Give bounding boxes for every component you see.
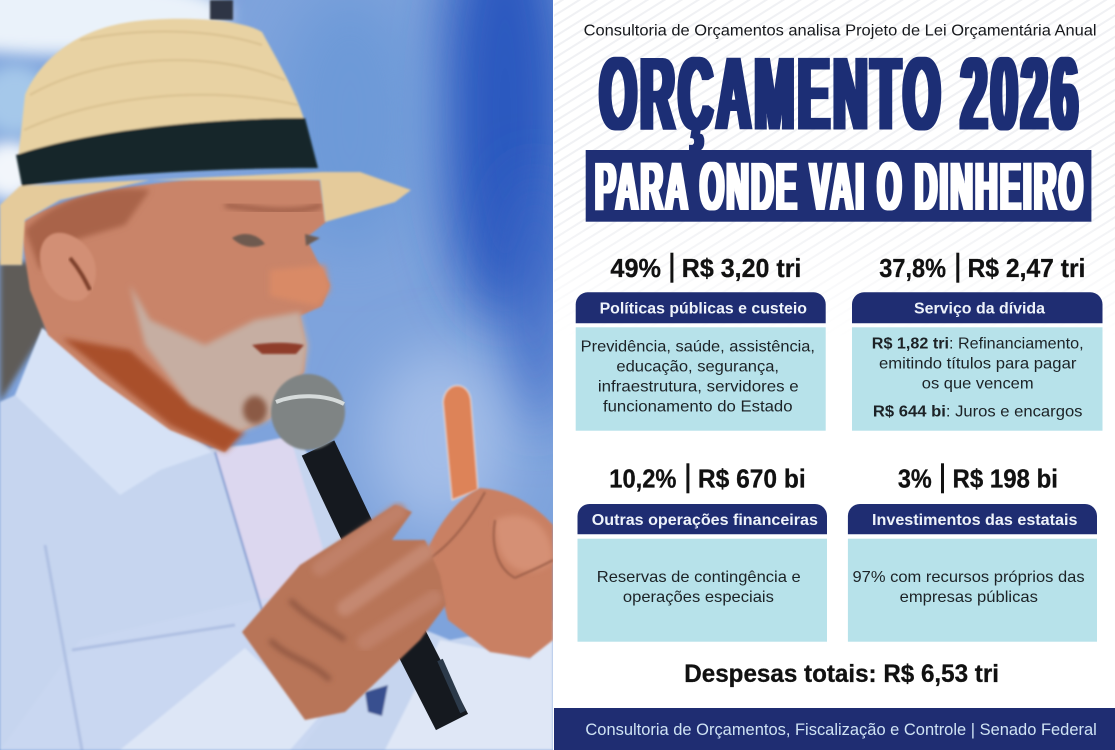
value: 10,2% [609, 463, 676, 493]
value: R$ 198 bi [952, 463, 1058, 493]
beard [130, 285, 308, 432]
header [852, 292, 1102, 323]
right panel background with diagonal stripes [554, 0, 1115, 266]
raised hand with pointing finger [425, 386, 553, 658]
body: operações especiais [623, 589, 774, 606]
photo background: blurred blue [0, 0, 570, 750]
body [852, 327, 1102, 431]
subtitle: Consultoria de Orçamentos analisa Projeto de Lei Orçamentária Anual [584, 22, 1097, 40]
card: Outras operações financeiras [578, 463, 827, 642]
body: Previdência, saúde, assistência, [581, 338, 815, 356]
microphone [271, 374, 463, 722]
header: Investimentos das estatais [872, 512, 1078, 529]
card: Investimentos das estatais [848, 463, 1097, 642]
value [879, 253, 1085, 283]
body [578, 539, 827, 642]
value: R$ 670 bi [698, 463, 806, 493]
body [848, 539, 1097, 642]
footer bar [554, 708, 1115, 750]
body: funcionamento do Estado [603, 398, 793, 416]
value [898, 463, 1058, 493]
total expenses: Despesas totais: R$ 6,53 tri [684, 660, 999, 688]
value [609, 463, 806, 493]
header [578, 504, 827, 534]
body: infraestrutura, servidores e [598, 378, 799, 396]
main title: ORÇAMENTO 2026 [600, 37, 1081, 153]
shirt [0, 328, 553, 750]
header [848, 504, 1097, 534]
value: 3% [898, 463, 932, 493]
header: Outras operações financeiras [592, 512, 818, 529]
header: Políticas públicas e custeio [600, 300, 807, 318]
value: 49% [610, 253, 661, 283]
body [576, 327, 826, 431]
body: R$ 1,82 tri: Refinanciamento, [872, 336, 1084, 352]
card: Políticas públicas e custeio [576, 253, 826, 431]
body: Reservas de contingência e [597, 569, 801, 586]
header: Serviço da dívida [914, 300, 1045, 318]
body: 97% com recursos próprios das [852, 569, 1085, 586]
value: 37,8% [879, 253, 946, 283]
value [610, 253, 801, 283]
card: Serviço da dívida [852, 253, 1102, 431]
body: emitindo títulos para pagar [879, 356, 1076, 372]
straw hat [0, 19, 411, 265]
body: os que vencem [922, 376, 1034, 392]
dark chair behind shoulder [0, 262, 48, 402]
header [576, 292, 826, 323]
head and neck [20, 177, 330, 452]
body: R$ 644 bi: Juros e encargos [873, 404, 1083, 420]
value: R$ 3,20 tri [682, 253, 801, 283]
value: R$ 2,47 tri [968, 253, 1085, 283]
body: educação, segurança, [616, 358, 779, 376]
title banner: PARA ONDE VAI O DINHEIRO [595, 149, 1085, 225]
footer bar: Consultoria de Orçamentos, Fiscalização e Controle | Senado Federal [585, 720, 1097, 739]
body: empresas públicas [900, 589, 1038, 606]
hand holding the microphone [242, 505, 446, 720]
photo: man in straw hat speaking into a microphone [0, 0, 570, 750]
